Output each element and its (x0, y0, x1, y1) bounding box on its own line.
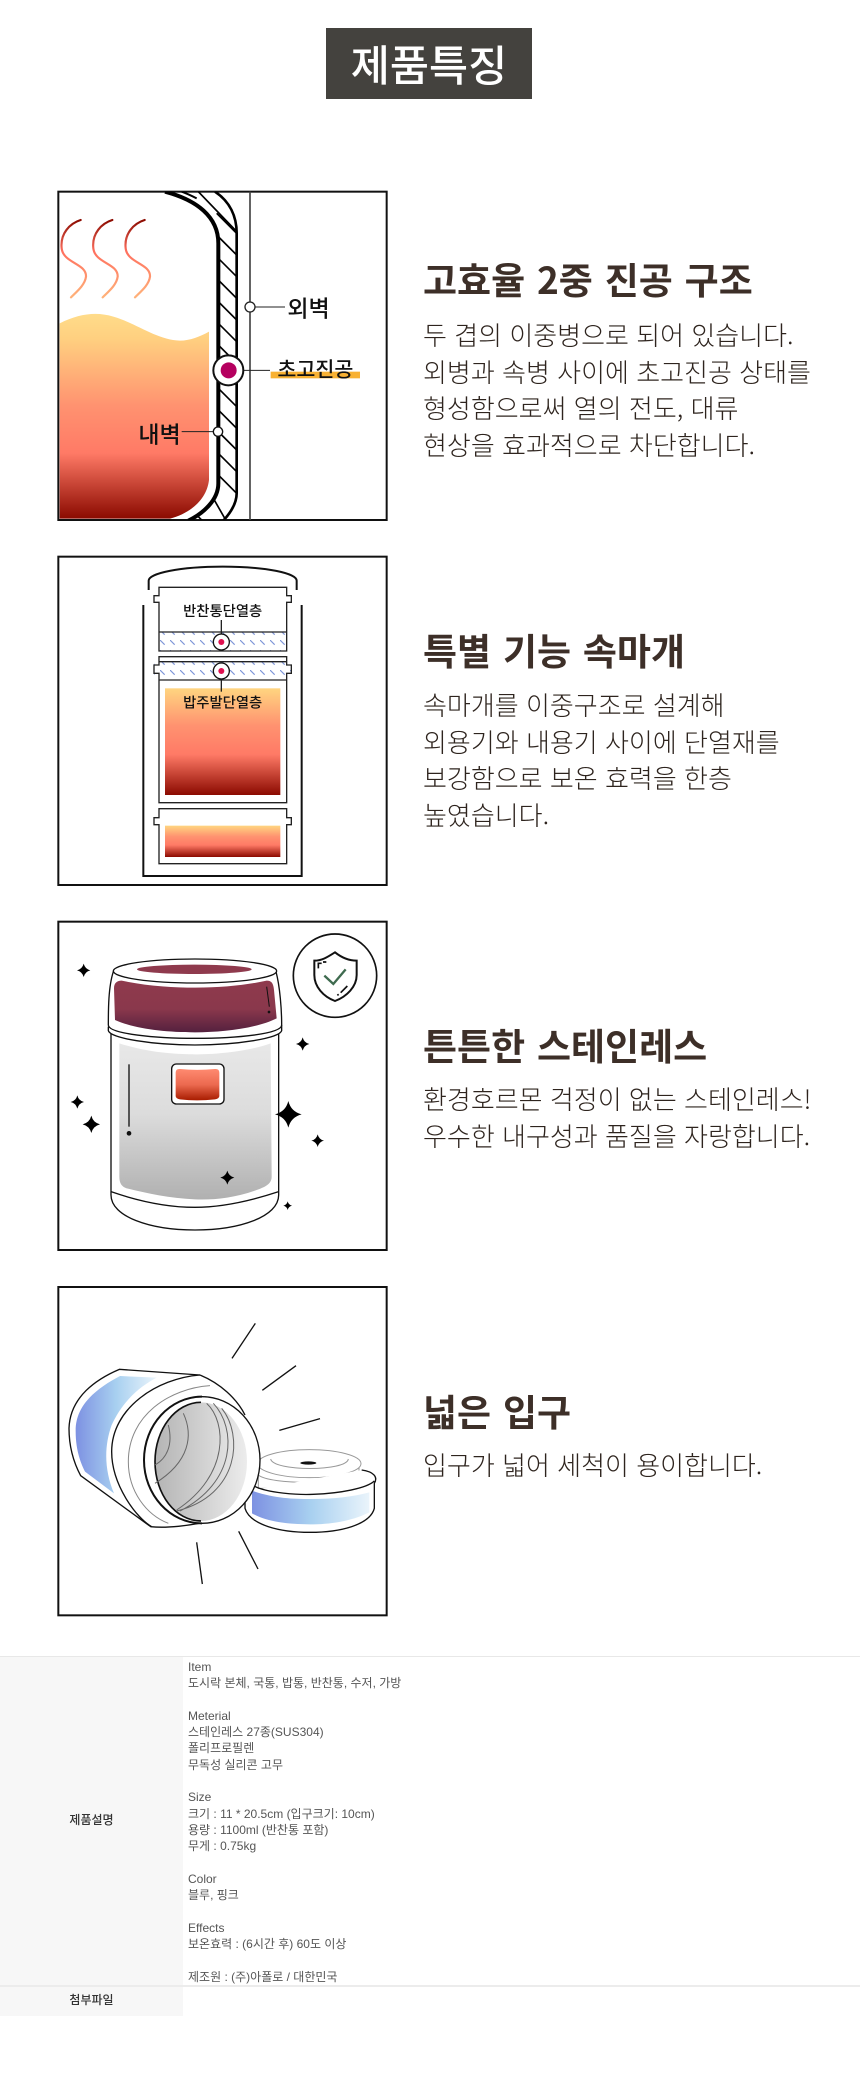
jar lid (108, 959, 282, 1045)
side dish container (154, 587, 291, 651)
heading: wide mouth: 넓은 입구 (423, 1383, 571, 1437)
panel: stainless jar illustration (57, 920, 388, 1251)
vacuum wall with hatching (165, 192, 240, 522)
hot food fill (60, 314, 209, 519)
title banner: 제품특징 (351, 33, 507, 94)
panel: inner lid cross-section diagram (57, 556, 388, 886)
rice bowl container: 밥주발단열층 (183, 692, 262, 713)
panel: double vacuum structure diagram (57, 190, 388, 521)
label: ultra-high vacuum (213, 353, 360, 385)
text: inner lid description: 속마개를 이중구조로 설계해 (423, 686, 725, 723)
outer body (143, 605, 302, 876)
outer lid (149, 567, 297, 590)
heading: special inner lid: 특별 기능 속마개 (423, 622, 685, 676)
steam (61, 220, 150, 297)
text: inner lid description: 외용기와 내용기 사이에 단열재를 (423, 722, 780, 760)
jar collar (112, 1375, 245, 1527)
heading: sturdy stainless: 튼튼한 스테인레스 (423, 1017, 707, 1071)
frame (58, 557, 387, 885)
spec table: attachment label: 첨부파일 (69, 1991, 114, 2008)
text: double vacuum description: 외병과 속병 사이에 초고진공 상태를 (423, 352, 811, 390)
frame (58, 192, 387, 520)
jar body (69, 1369, 207, 1527)
label: inner wall (138, 416, 223, 450)
text: wide mouth description: 입구가 넓어 세척이 용이합니다. (423, 1446, 762, 1483)
text: double vacuum description: 현상을 효과적으로 차단합니다. (423, 426, 755, 462)
sparkles (71, 964, 324, 1210)
label: outer wall: 외벽 (287, 290, 330, 324)
lid (245, 1450, 376, 1532)
text: stainless description: 환경호르몬 걱정이 없는 스테인레스! (423, 1080, 811, 1117)
heading: high efficiency double vacuum: 고효율 2중 진공 구조 (423, 251, 753, 305)
label: outer wall (245, 290, 330, 324)
label: inner wall: 내벽 (138, 416, 181, 450)
panel: wide mouth illustration (57, 1286, 388, 1616)
label: ultra-high vacuum: 초고진공 (277, 353, 353, 383)
spec table: middle rule (0, 1985, 860, 1987)
jar opening (144, 1397, 260, 1523)
text: double vacuum description: 형성함으로써 열의 전도, 대류 (423, 389, 738, 426)
text: double vacuum description: 두 겹의 이중병으로 되어 있습니다. (423, 316, 794, 353)
soup container (154, 809, 291, 864)
frame (58, 922, 387, 1250)
icon: shield with check (293, 934, 377, 1017)
outer wall line (248, 192, 252, 520)
blue label (76, 1376, 157, 1493)
text: inner lid description: 높였습니다. (423, 796, 549, 832)
text: stainless description (423, 1080, 811, 1154)
title banner (326, 28, 532, 99)
spec table: description label cell (0, 1657, 183, 1985)
spec table: attachment label cell (0, 1987, 183, 2016)
text: stainless description: 우수한 내구성과 품질을 자랑합니다. (423, 1116, 810, 1154)
spec table: top rule (0, 1656, 860, 1657)
side dish container: 반찬통단열층 (183, 600, 262, 621)
text: inner lid description (423, 686, 780, 832)
jar window (172, 1064, 224, 1104)
text: double vacuum description (423, 316, 811, 462)
spec table: description label: 제품설명 (69, 1811, 114, 1828)
rice bowl container (154, 657, 291, 803)
spec table: product details: Item 도시락 본체, 국통, 밥통, 반찬통, 수저, 가방 Meterial 스테인레스 27종(SUS304) 폴리프로필렌 무독성 실리콘 고무 Size 크기 : 11 * 20.5cm (입구크기: 10cm) 용량 : 1100ml (반찬통 포함) 무게 : 0.75kg Color 블루, 핑크 Effects 보온효력 : (6시간 후) 60도 이상 제조원 : (주)아폴로 / 대한민국 (188, 1660, 401, 1984)
jar body (111, 1032, 279, 1230)
text: inner lid description: 보강함으로 보온 효력을 한층 (423, 759, 732, 796)
radiating lines (197, 1323, 320, 1584)
frame (58, 1287, 387, 1615)
